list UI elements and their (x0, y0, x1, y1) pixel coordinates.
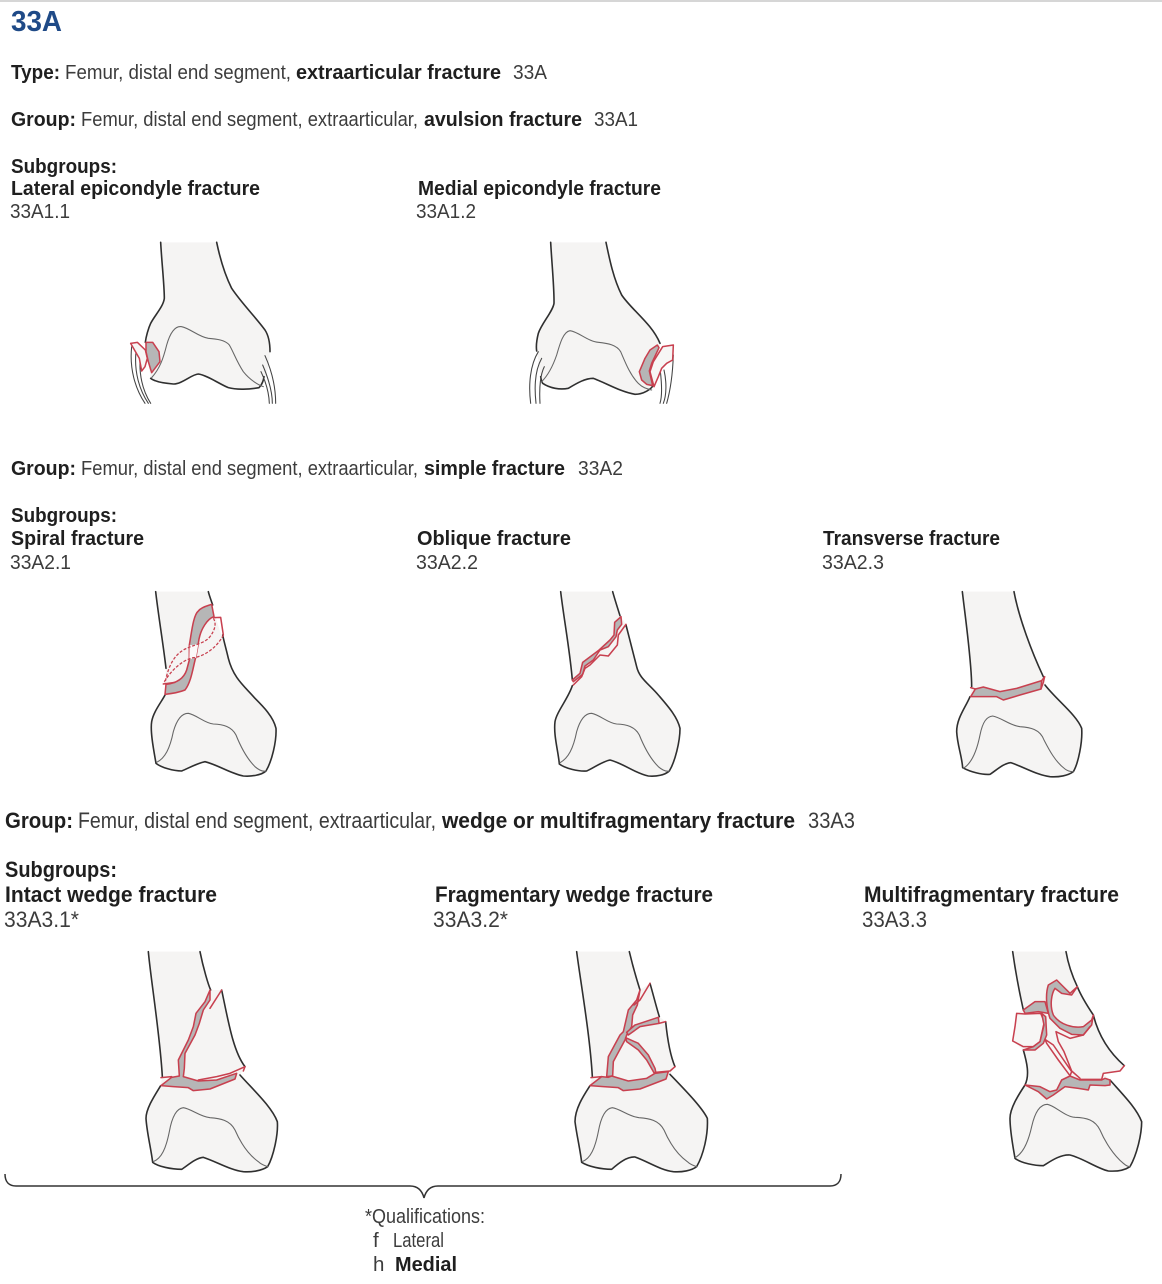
label: spiral (10, 527, 144, 574)
femur: fragmentary wedge fracture 33A3.2 (575, 952, 707, 1172)
group line 33A1: 33A1 (594, 108, 638, 131)
label: lateral epicondyle (10, 177, 260, 223)
type line: extraarticular fracture (296, 61, 501, 84)
type line: 33A (513, 61, 547, 84)
femur: transverse fracture 33A2.3 (957, 592, 1082, 777)
group line 33A1 (11, 108, 638, 131)
group line 33A3: wedge or multifragmentary fracture (441, 808, 795, 833)
type line (11, 61, 547, 84)
femur: lateral epicondyle fracture 33A1.1 (131, 242, 276, 403)
qualifications note: *Qualifications: (365, 1205, 485, 1228)
label: multifragmentary: 33A3.3 (862, 907, 927, 932)
subgroups heading 33A2: Subgroups: (11, 504, 117, 527)
label: transverse (822, 527, 1000, 574)
label: medial epicondyle (416, 177, 661, 223)
label: transverse: 33A2.3 (822, 551, 884, 574)
type line: Femur, distal end segment, (65, 61, 291, 84)
label: intact wedge (4, 882, 217, 932)
title: 33A (11, 6, 62, 38)
bracket spanning 33A3.1 and 33A3.2 (5, 1174, 841, 1198)
label: fragmentary wedge: 33A3.2* (433, 907, 508, 932)
group line 33A3: Group: (5, 808, 73, 833)
group line 33A1: Femur, distal end segment, extraarticular, (81, 108, 418, 131)
qualifications note: Lateral (393, 1229, 444, 1252)
label: medial epicondyle: 33A1.2 (416, 200, 476, 223)
label: oblique: Oblique fracture (417, 527, 571, 550)
qualifications note: h (373, 1253, 384, 1276)
label: medial epicondyle: Medial epicondyle fracture (418, 177, 661, 200)
femur: medial epicondyle fracture 33A1.2 (530, 242, 673, 403)
group line 33A2: Femur, distal end segment, extraarticular, (81, 457, 418, 480)
group line 33A2: simple fracture (424, 457, 565, 480)
label: lateral epicondyle: 33A1.1 (10, 200, 70, 223)
label: oblique: 33A2.2 (416, 551, 478, 574)
label: lateral epicondyle: Lateral epicondyle fracture (11, 177, 260, 200)
group line 33A3: 33A3 (808, 808, 855, 833)
subgroups heading 33A1: Subgroups: (11, 155, 117, 178)
femur: spiral fracture 33A2.1 (151, 592, 276, 776)
group line 33A3: Femur, distal end segment, extraarticular, (78, 808, 436, 833)
qualifications note: Medial (395, 1253, 457, 1276)
label: oblique (416, 527, 571, 574)
group line 33A2: 33A2 (578, 457, 623, 480)
label: spiral: 33A2.1 (10, 551, 71, 574)
femur: multifragmentary fracture 33A3.3 (1010, 952, 1142, 1171)
group line 33A2: Group: (11, 457, 76, 480)
label: intact wedge: Intact wedge fracture (5, 882, 217, 907)
label: fragmentary wedge (433, 882, 713, 932)
label: fragmentary wedge: Fragmentary wedge fracture (435, 882, 713, 907)
label: multifragmentary (862, 882, 1119, 932)
label: intact wedge: 33A3.1* (4, 907, 79, 932)
type line: Type: (11, 61, 60, 84)
subgroups heading 33A3: Subgroups: (5, 857, 117, 882)
group line 33A3 (5, 808, 855, 833)
qualifications note (365, 1205, 485, 1276)
label: transverse: Transverse fracture (823, 527, 1000, 550)
qualifications note: f (373, 1229, 379, 1252)
group line 33A1: Group: (11, 108, 76, 131)
group line 33A1: avulsion fracture (424, 108, 582, 131)
label: multifragmentary: Multifragmentary fracture (864, 882, 1119, 907)
femur: intact wedge fracture 33A3.1 (146, 952, 277, 1172)
femur: oblique fracture 33A2.2 (555, 592, 680, 776)
group line 33A2 (11, 457, 623, 480)
label: spiral: Spiral fracture (11, 527, 144, 550)
